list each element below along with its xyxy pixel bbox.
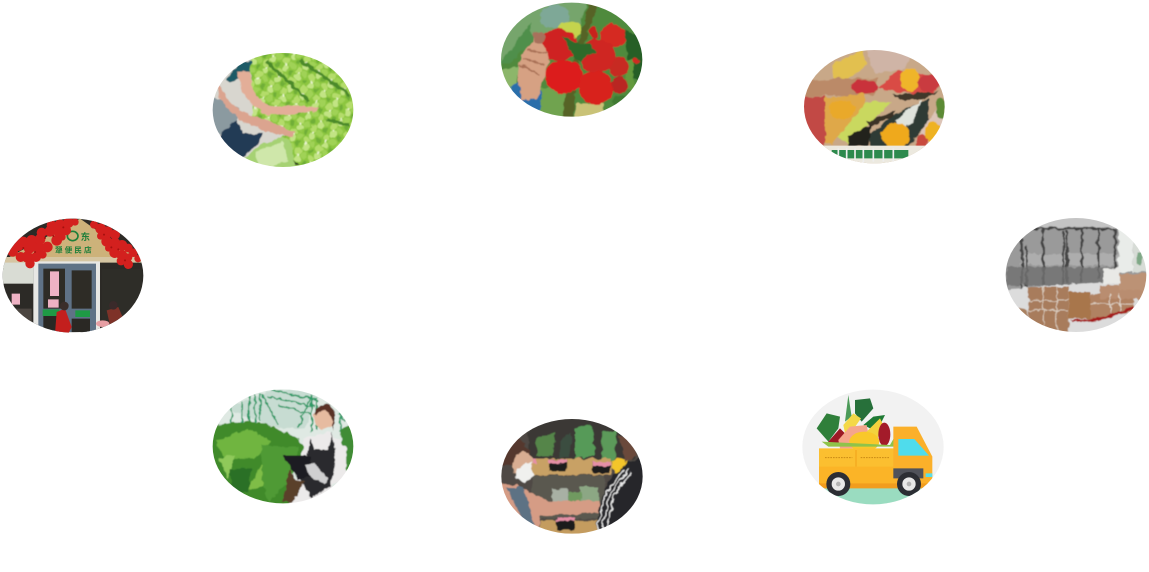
price labels <box>549 460 610 530</box>
cab <box>893 427 932 485</box>
photo: worker tending rows of lettuce <box>210 50 357 170</box>
cargo bed <box>819 448 894 468</box>
wire basket edge <box>824 146 925 164</box>
store name: 东 <box>81 231 90 242</box>
photo: shoppers choosing vegetables at a shelf <box>501 419 643 534</box>
facade roof <box>3 219 140 260</box>
photo: woman with clipboard in a greenhouse <box>212 390 354 504</box>
cartons <box>1028 287 1068 334</box>
clipboard <box>282 455 313 480</box>
photo: convenience store entrance with red balloons: 犟便民店 <box>55 245 94 255</box>
wooden shelf boards <box>528 459 612 475</box>
plants <box>208 422 305 508</box>
wheels <box>826 472 921 496</box>
hand and sleeve <box>510 77 542 110</box>
red balloon garlands <box>7 217 142 269</box>
woman <box>288 432 347 508</box>
people <box>55 309 72 334</box>
worker clothes <box>227 62 252 82</box>
woman with mask <box>502 482 601 528</box>
photo: hand picking tomatoes on the vine <box>501 2 642 117</box>
vine stem <box>562 0 598 120</box>
photo: convenience store entrance with red balloons <box>0 215 147 335</box>
photo: packaged vegetables in a supermarket basket <box>804 50 945 164</box>
road <box>820 485 926 504</box>
vegetables <box>863 415 885 428</box>
sale star <box>611 458 629 475</box>
illustration: yellow truck loaded with vegetables <box>800 387 947 508</box>
man in track jacket <box>595 458 643 530</box>
tomatoes <box>539 24 639 104</box>
steel columns <box>1022 227 1115 289</box>
greenhouse frame <box>232 390 345 432</box>
dark gaps between lettuce rows <box>267 60 350 125</box>
photo: warehouse with stacked cartons <box>1006 218 1146 332</box>
